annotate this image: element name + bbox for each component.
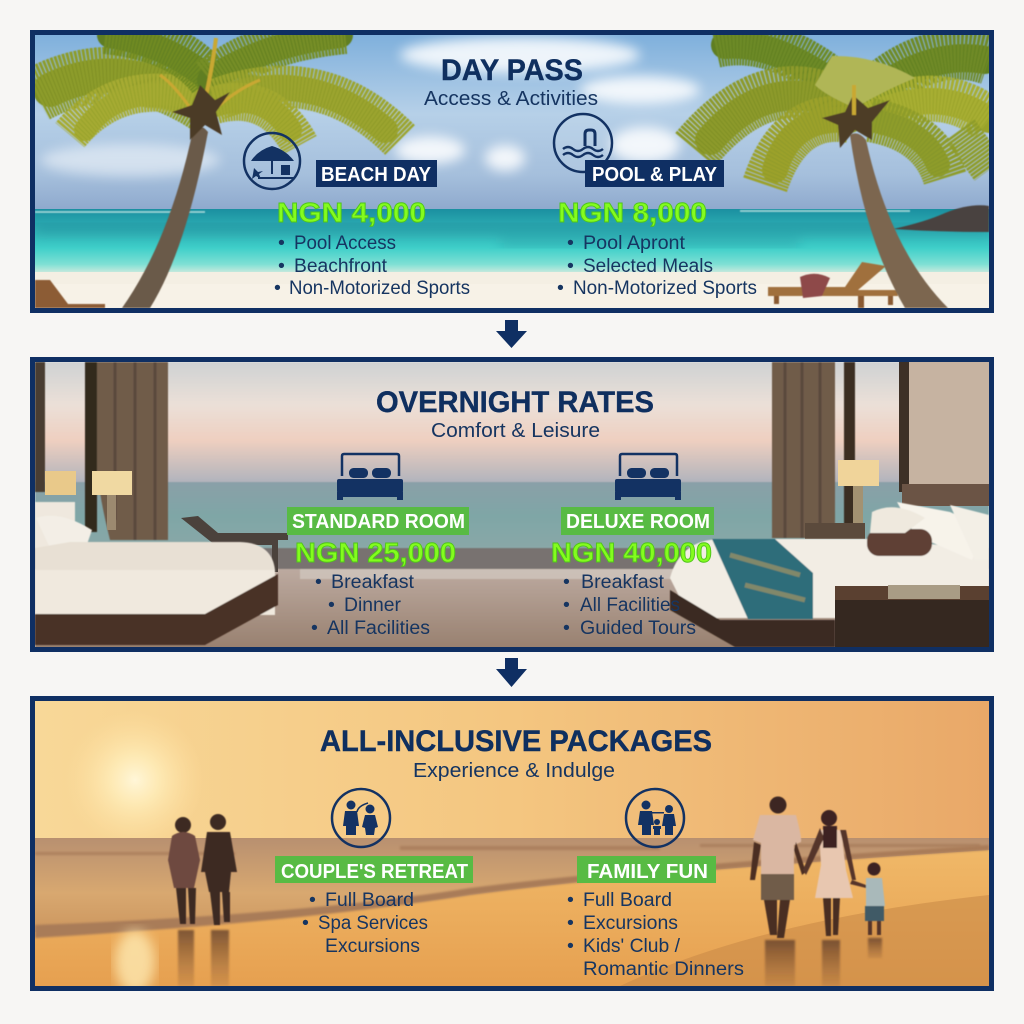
- feature list: family fun: •: [567, 935, 574, 957]
- feature list: deluxe: All Facilities: [580, 594, 680, 616]
- feature list: deluxe: [563, 571, 696, 639]
- icon: family: [626, 789, 684, 847]
- feature list: standard: •: [315, 571, 322, 593]
- heading: ALL-INCLUSIVE PACKAGES: [320, 725, 712, 758]
- heading: OVERNIGHT RATES: [376, 386, 654, 419]
- icon: pool: [554, 114, 612, 172]
- label: family fun: FAMILY FUN: [587, 861, 708, 883]
- feature list: family fun: •: [567, 889, 574, 911]
- feature list: pool and play: •: [557, 277, 564, 299]
- feature list: pool and play: Selected Meals: [583, 255, 713, 277]
- feature list: couple's retreat: Excursions: [325, 935, 420, 957]
- sun lounger left: [35, 280, 105, 308]
- feature list: family fun: •: [567, 912, 574, 934]
- icon: couple: [332, 789, 390, 847]
- feature list: beach day: [274, 232, 470, 299]
- label: family fun: [577, 856, 716, 883]
- panel frame: [32, 32, 992, 310]
- label: beach day: BEACH DAY: [321, 164, 432, 186]
- right wall: [909, 362, 989, 484]
- arrow down 2: [496, 658, 527, 687]
- right headboard: [902, 484, 989, 506]
- label: pool and play: POOL & PLAY: [592, 164, 718, 186]
- palm left trunk: [122, 126, 208, 308]
- feature list: couple's retreat: Full Board: [325, 889, 414, 911]
- panel frame: [32, 360, 992, 650]
- feature list: standard: •: [328, 594, 335, 616]
- feature list: deluxe: •: [563, 571, 570, 593]
- label: deluxe room: DELUXE ROOM: [566, 511, 710, 533]
- feature list: pool and play: [557, 232, 757, 299]
- feature list: standard: [311, 571, 430, 639]
- icon: bed right: [615, 454, 681, 500]
- panel frame: [32, 698, 992, 988]
- feature list: couple's retreat: •: [302, 912, 309, 934]
- palm right trunk: [850, 133, 948, 308]
- feature list: couple's retreat: [302, 889, 428, 957]
- feature list: pool and play: •: [567, 255, 574, 277]
- rocks: [893, 205, 989, 232]
- feature list: standard: •: [311, 617, 318, 639]
- feature list: standard: Breakfast: [331, 571, 415, 593]
- feature list: beach day: Pool Access: [294, 232, 396, 254]
- feature list: couple's retreat: Spa Services: [318, 912, 428, 934]
- feature list: pool and play: Pool Apront: [583, 232, 686, 254]
- feature list: pool and play: •: [567, 232, 574, 254]
- subheading: Comfort & Leisure: [431, 420, 600, 442]
- panel: all-inclusive packages: [32, 698, 992, 994]
- right bed: [670, 502, 989, 647]
- palm right fronds: [695, 42, 989, 185]
- feature list: deluxe: Breakfast: [581, 571, 665, 593]
- right curtains: [772, 362, 855, 538]
- feature list: family fun: [567, 889, 744, 980]
- feature list: family fun: Kids' Club /: [583, 935, 681, 957]
- family silhouettes: [750, 796, 885, 938]
- feature list: deluxe: Guided Tours: [580, 617, 696, 639]
- feature list: family fun: Full Board: [583, 889, 672, 911]
- right side table: [835, 585, 989, 648]
- heading: DAY PASS: [441, 54, 583, 87]
- price: deluxe: NGN 40,000: [551, 537, 712, 568]
- feature list: pool and play: Non-Motorized Sports: [573, 277, 757, 299]
- icon: beach umbrella: [244, 133, 300, 189]
- feature list: standard: All Facilities: [327, 617, 430, 639]
- label: couple's retreat: COUPLE'S RETREAT: [281, 861, 468, 883]
- feature list: family fun: Romantic Dinners: [583, 958, 744, 980]
- beach photo background: [35, 32, 989, 308]
- feature list: beach day: Non-Motorized Sports: [289, 277, 470, 299]
- lounge chair: [181, 516, 288, 572]
- sunset photo background: [35, 701, 989, 994]
- left bed: [35, 502, 278, 645]
- left window and curtains: [35, 362, 168, 540]
- feature list: beach day: •: [278, 255, 285, 277]
- couple silhouettes: [168, 814, 237, 925]
- panel: overnight rates: [32, 360, 992, 650]
- subheading: Experience & Indulge: [413, 760, 615, 782]
- feature list: couple's retreat: •: [309, 889, 316, 911]
- feature list: standard: Dinner: [344, 594, 401, 616]
- palm left fronds: [36, 32, 400, 145]
- feature list: beach day: •: [278, 232, 285, 254]
- right lamp: [838, 460, 879, 524]
- feature list: deluxe: •: [563, 594, 570, 616]
- feature list: beach day: Beachfront: [294, 255, 388, 277]
- feature list: deluxe: •: [563, 617, 570, 639]
- subheading: Access & Activities: [424, 88, 598, 110]
- arrow down 1: [496, 320, 527, 348]
- feature list: beach day: •: [274, 277, 281, 299]
- sun lounger right: [768, 262, 898, 308]
- label: standard room: STANDARD ROOM: [292, 511, 465, 533]
- price: NGN 8,000: [558, 197, 707, 228]
- icon: bed left: [337, 454, 403, 500]
- price: standard: NGN 25,000: [295, 537, 456, 568]
- panel: day pass: [32, 32, 992, 310]
- price: NGN 4,000: [277, 197, 426, 228]
- feature list: family fun: Excursions: [583, 912, 678, 934]
- left lamps: [45, 471, 132, 530]
- hotel room photo background: [35, 362, 989, 649]
